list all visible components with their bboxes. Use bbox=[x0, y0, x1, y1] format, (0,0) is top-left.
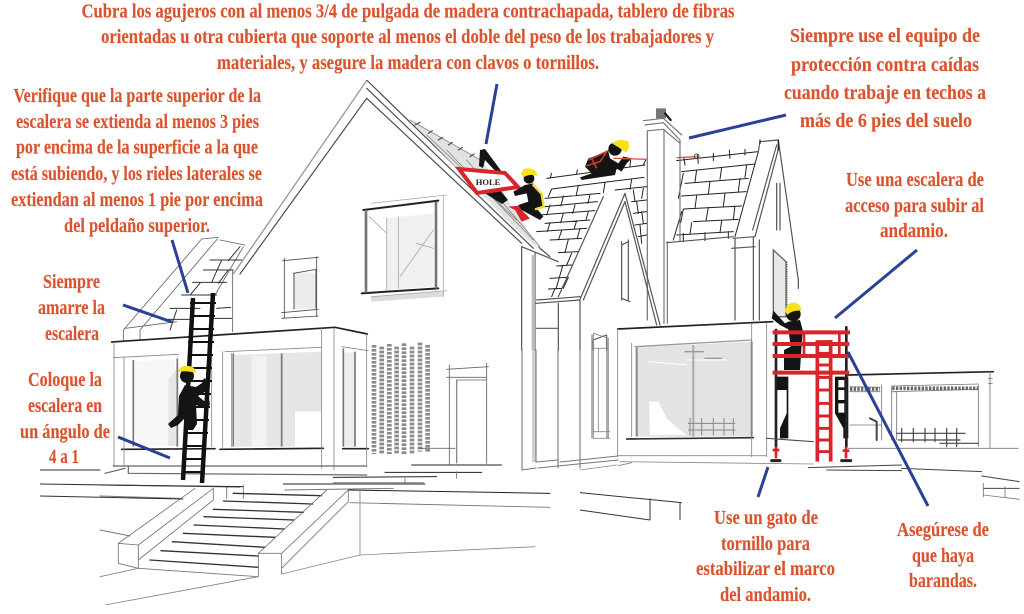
callout: cover holes bbox=[82, 0, 735, 74]
central lower walls bbox=[522, 335, 618, 470]
worker climbing ladder bbox=[168, 366, 210, 430]
callout: ladder extension: extiendan al menos 1 pie por encima bbox=[11, 189, 263, 211]
callout: cover holes: materiales, y asegure la madera con clavos o tornillos. bbox=[217, 52, 599, 74]
callout: fall protection: Siempre use el equipo de bbox=[790, 25, 980, 47]
main gable and upper walls bbox=[123, 80, 550, 341]
callout: tie ladder bbox=[38, 271, 105, 345]
centre gable bbox=[522, 193, 660, 350]
chimney bbox=[643, 108, 682, 323]
red rails bbox=[773, 332, 850, 373]
callout: access ladder bbox=[845, 169, 984, 242]
hole cover sign bbox=[459, 149, 518, 204]
callout: cover holes: orientadas u otra cubierta que soporte al menos el doble del peso de los trabajadores y bbox=[101, 26, 714, 48]
shingles right bbox=[673, 149, 758, 242]
hole cover sign: HOLE bbox=[476, 177, 501, 187]
worker on scaffold bbox=[772, 303, 803, 370]
pergola bbox=[848, 372, 1018, 448]
callout: screw jack: del andamio. bbox=[720, 584, 811, 606]
callout: tie ladder: Siempre bbox=[43, 271, 100, 293]
shingles left bbox=[537, 160, 647, 297]
callout: ladder angle: un ángulo de bbox=[20, 421, 110, 443]
callout: fall protection bbox=[784, 25, 986, 132]
callout: screw jack: tornillo para bbox=[721, 533, 810, 555]
callout: screw jack: estabilizar el marco bbox=[696, 558, 835, 580]
callout: cover holes: Cubra los agujeros con al menos 3/4 de pulgada de madera contrachapada, tablero de fibras bbox=[82, 0, 735, 22]
callout: guardrails: barandas. bbox=[909, 570, 977, 592]
callout: fall protection: cuando trabaje en techos a bbox=[784, 82, 986, 104]
callout: tie ladder: escalera bbox=[45, 323, 99, 345]
callout: ladder angle bbox=[20, 369, 110, 468]
callout: guardrails: Asegúrese de bbox=[897, 519, 989, 541]
callout: ladder extension: escalera se extienda al menos 3 pies bbox=[16, 111, 259, 133]
callout: ladder extension: por encima de la superficie a la que bbox=[16, 136, 258, 158]
callout: access ladder: acceso para subir al bbox=[845, 195, 984, 217]
callout: screw jack bbox=[696, 507, 835, 606]
red access ladder bbox=[816, 340, 832, 462]
small upper window bbox=[282, 257, 318, 318]
callout: ladder extension: del peldaño superior. bbox=[64, 215, 210, 237]
small left roof with shingles bbox=[123, 237, 245, 341]
callout: access ladder: Use una escalera de bbox=[846, 169, 984, 191]
callout: guardrails: que haya bbox=[912, 545, 974, 567]
door bbox=[420, 363, 488, 464]
worker and scaffold bbox=[767, 303, 851, 462]
callout: ladder extension: Verifique que la parte superior de la bbox=[14, 85, 261, 107]
callout: guardrails bbox=[897, 519, 989, 592]
screw jacks bbox=[773, 447, 849, 458]
callout: fall protection: más de 6 pies del suelo bbox=[800, 110, 972, 132]
black frame bbox=[775, 377, 848, 438]
central and right upper roof bbox=[522, 108, 798, 350]
callout: ladder extension bbox=[11, 85, 263, 237]
terrace and ground lines bbox=[100, 465, 550, 493]
staircase bbox=[100, 488, 535, 605]
lower left block bbox=[100, 327, 550, 605]
callout: ladder angle: 4 a 1 bbox=[49, 446, 79, 468]
brick screen bbox=[374, 343, 428, 454]
callout: ladder extension: está subiendo, y los rieles laterales se bbox=[11, 163, 262, 185]
worker with harness on roof bbox=[580, 140, 699, 180]
pointer lines bbox=[118, 84, 928, 506]
extension ladder bbox=[182, 293, 216, 483]
callout: fall protection: protección contra caídas bbox=[791, 54, 979, 76]
far left ground lines bbox=[40, 470, 240, 499]
callout: ladder angle: Coloque la bbox=[28, 369, 102, 391]
callout: screw jack: Use un gato de bbox=[714, 507, 818, 529]
callout: tie ladder: amarre la bbox=[38, 297, 105, 319]
callout: ladder angle: escalera en bbox=[28, 395, 102, 417]
scaffold frame bbox=[767, 303, 851, 462]
lower right block and pergola bbox=[580, 322, 1019, 520]
callout: access ladder: andamio. bbox=[880, 220, 948, 242]
large upper window bbox=[362, 195, 447, 302]
right dormer bbox=[667, 140, 798, 320]
worker kneeling by hole bbox=[508, 168, 544, 222]
